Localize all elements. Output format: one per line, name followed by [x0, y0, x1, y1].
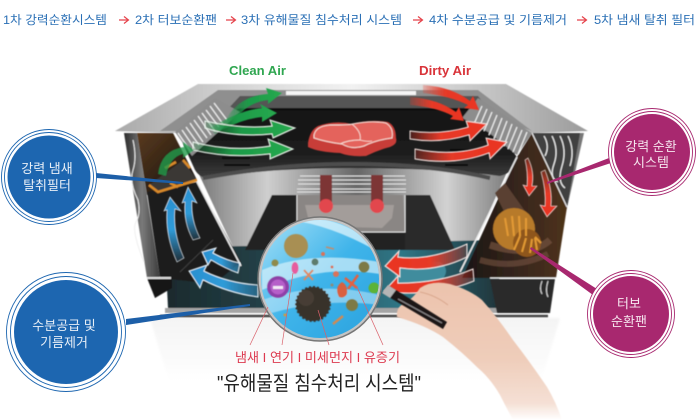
- hood inner bar: [160, 90, 532, 131]
- heading: clean air: Clean Air: [229, 63, 286, 78]
- pointer lines to pollutants: [250, 273, 383, 345]
- right chamber: [462, 133, 567, 278]
- tan particle: [284, 234, 308, 258]
- floor: [165, 240, 503, 312]
- callout: strong circulation system: 시스템: [633, 155, 669, 170]
- process steps header: 2차 터보순환팬: [135, 13, 217, 27]
- right wall: [532, 133, 581, 208]
- grill cabinet illustration: [115, 84, 588, 316]
- callout: strong circulation system: [608, 108, 696, 196]
- process steps header: 4차 수분공급 및 기름제거: [429, 13, 567, 27]
- red particles: [321, 252, 325, 256]
- left chamber: [137, 133, 197, 195]
- callout: turbo circulation fan: 순환팬: [611, 314, 647, 329]
- air arrows: dirty air (red): [384, 85, 557, 300]
- base strip: [165, 308, 550, 313]
- air arrows: clean air (green): [158, 88, 295, 176]
- floor reflection: [150, 318, 560, 385]
- hand holding magnifier: [397, 283, 562, 420]
- green germ: [368, 282, 380, 294]
- connector line: odor filter: [96, 173, 183, 184]
- callout: strong odor filter: [2, 130, 96, 224]
- steak: [308, 121, 396, 156]
- pollutant labels: 냄새 I 연기 I 미세먼지 I 유증기: [235, 350, 400, 365]
- left lower wedge: [147, 278, 172, 298]
- turbo fan: [495, 183, 535, 240]
- pink germ: [292, 262, 298, 274]
- left wall: [124, 133, 160, 278]
- filter vent right: [462, 98, 532, 155]
- hood top: [115, 84, 588, 133]
- process steps header: 1차 강력순환시스템: [3, 13, 107, 27]
- air arrows: moisture flow (blue): [164, 187, 258, 297]
- callout: turbo circulation fan: [588, 270, 674, 358]
- magnifier handle: [382, 285, 447, 329]
- callout: turbo circulation fan: 터보: [617, 296, 641, 311]
- system title: "유해물질 침수처리 시스템": [217, 372, 421, 395]
- charcoal filter: [149, 160, 197, 192]
- process steps header: [3, 13, 695, 27]
- callout: strong odor filter: 탈취필터: [23, 178, 71, 193]
- heading: dirty air: Dirty Air: [419, 63, 471, 78]
- connector line: circulation: [547, 158, 611, 184]
- connector line: turbo fan: [530, 247, 597, 295]
- filter vent left: [175, 98, 240, 156]
- process steps header: 3차 유해물질 침수처리 시스템: [241, 13, 402, 27]
- griddle plate: [180, 108, 517, 178]
- dark soot particle: [296, 287, 330, 321]
- callout: moisture supply and grease removal: [6, 272, 126, 392]
- grill bars and box: [297, 195, 405, 232]
- left lower chamber: [147, 182, 241, 284]
- process steps header: 5차 냄새 탈취 필터: [594, 13, 695, 27]
- right lower panel: [490, 279, 555, 313]
- callout: moisture supply and grease removal: 기름제거: [40, 335, 88, 350]
- callout: strong odor filter: 강력 냄새: [21, 161, 73, 176]
- callout: strong circulation system: 강력 순환: [625, 139, 677, 154]
- main interior: [197, 150, 517, 272]
- connector line: moisture: [126, 304, 250, 325]
- magnifier lens with particles: [258, 216, 382, 341]
- callout: moisture supply and grease removal: 수분공급 및: [32, 318, 96, 333]
- purple germ: [267, 276, 289, 298]
